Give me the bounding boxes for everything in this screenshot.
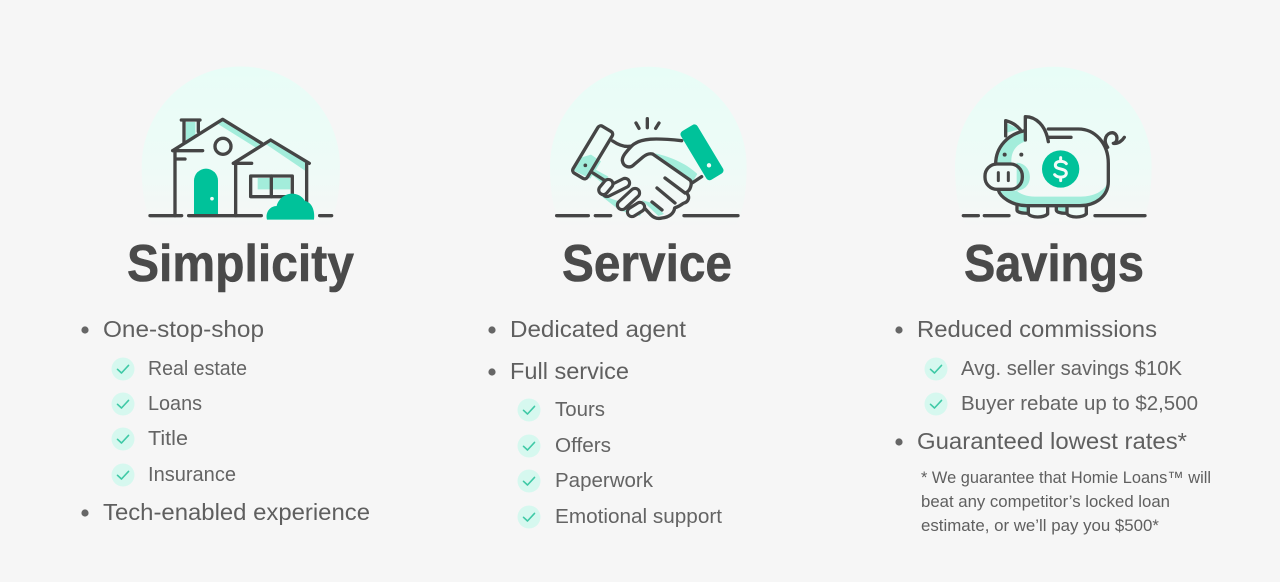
panel: savings bbox=[895, 67, 1211, 535]
footnote: rate guarantee: beat any competitor’s locked loan bbox=[921, 493, 1170, 511]
heading: Savings: Savings bbox=[964, 235, 1144, 293]
bullet list: service: Dedicated agent bbox=[510, 316, 686, 342]
bullet list: simplicity: One-stop-shop bbox=[103, 316, 264, 342]
bullet list: service bbox=[488, 316, 722, 528]
bullet list: savings bbox=[895, 316, 1198, 454]
bullet list: simplicity: Title bbox=[148, 428, 188, 450]
bullet list: savings: Avg. seller savings $10K bbox=[961, 358, 1183, 380]
bullet list: simplicity: Real estate bbox=[148, 358, 247, 380]
heading: Simplicity: Simplicity bbox=[127, 235, 354, 293]
footnote: rate guarantee: * We guarantee that Homie Loans™ will bbox=[921, 469, 1211, 487]
bullet list: simplicity: Loans bbox=[148, 393, 202, 415]
bullet list: service: Emotional support bbox=[555, 506, 722, 528]
bullet list: service: Tours bbox=[555, 399, 605, 421]
icon: handshake bbox=[550, 67, 747, 230]
bullet list: service: Offers bbox=[555, 435, 611, 457]
bullet list: savings: Guaranteed lowest rates* bbox=[917, 428, 1187, 454]
bullet list: simplicity: Tech-enabled experience bbox=[103, 499, 370, 525]
icon: piggy bank bbox=[955, 67, 1152, 230]
bullet list: savings: Buyer rebate up to $2,500 bbox=[961, 393, 1198, 415]
bullet list: service: Full service bbox=[510, 358, 629, 384]
footnote: rate guarantee: estimate, or we’ll pay you $500* bbox=[921, 517, 1160, 535]
bullet list: simplicity: Insurance bbox=[148, 464, 236, 486]
bullet list: simplicity bbox=[81, 316, 370, 525]
panel: simplicity bbox=[81, 66, 370, 525]
heading: Service: Service bbox=[562, 235, 732, 293]
left hand fingers bbox=[603, 183, 640, 212]
bullet list: savings: Reduced commissions bbox=[917, 316, 1157, 342]
footnote: rate guarantee bbox=[921, 469, 1211, 535]
icon: house bbox=[142, 66, 340, 230]
panel: service bbox=[488, 67, 747, 528]
bullet list: service: Paperwork bbox=[555, 470, 654, 492]
